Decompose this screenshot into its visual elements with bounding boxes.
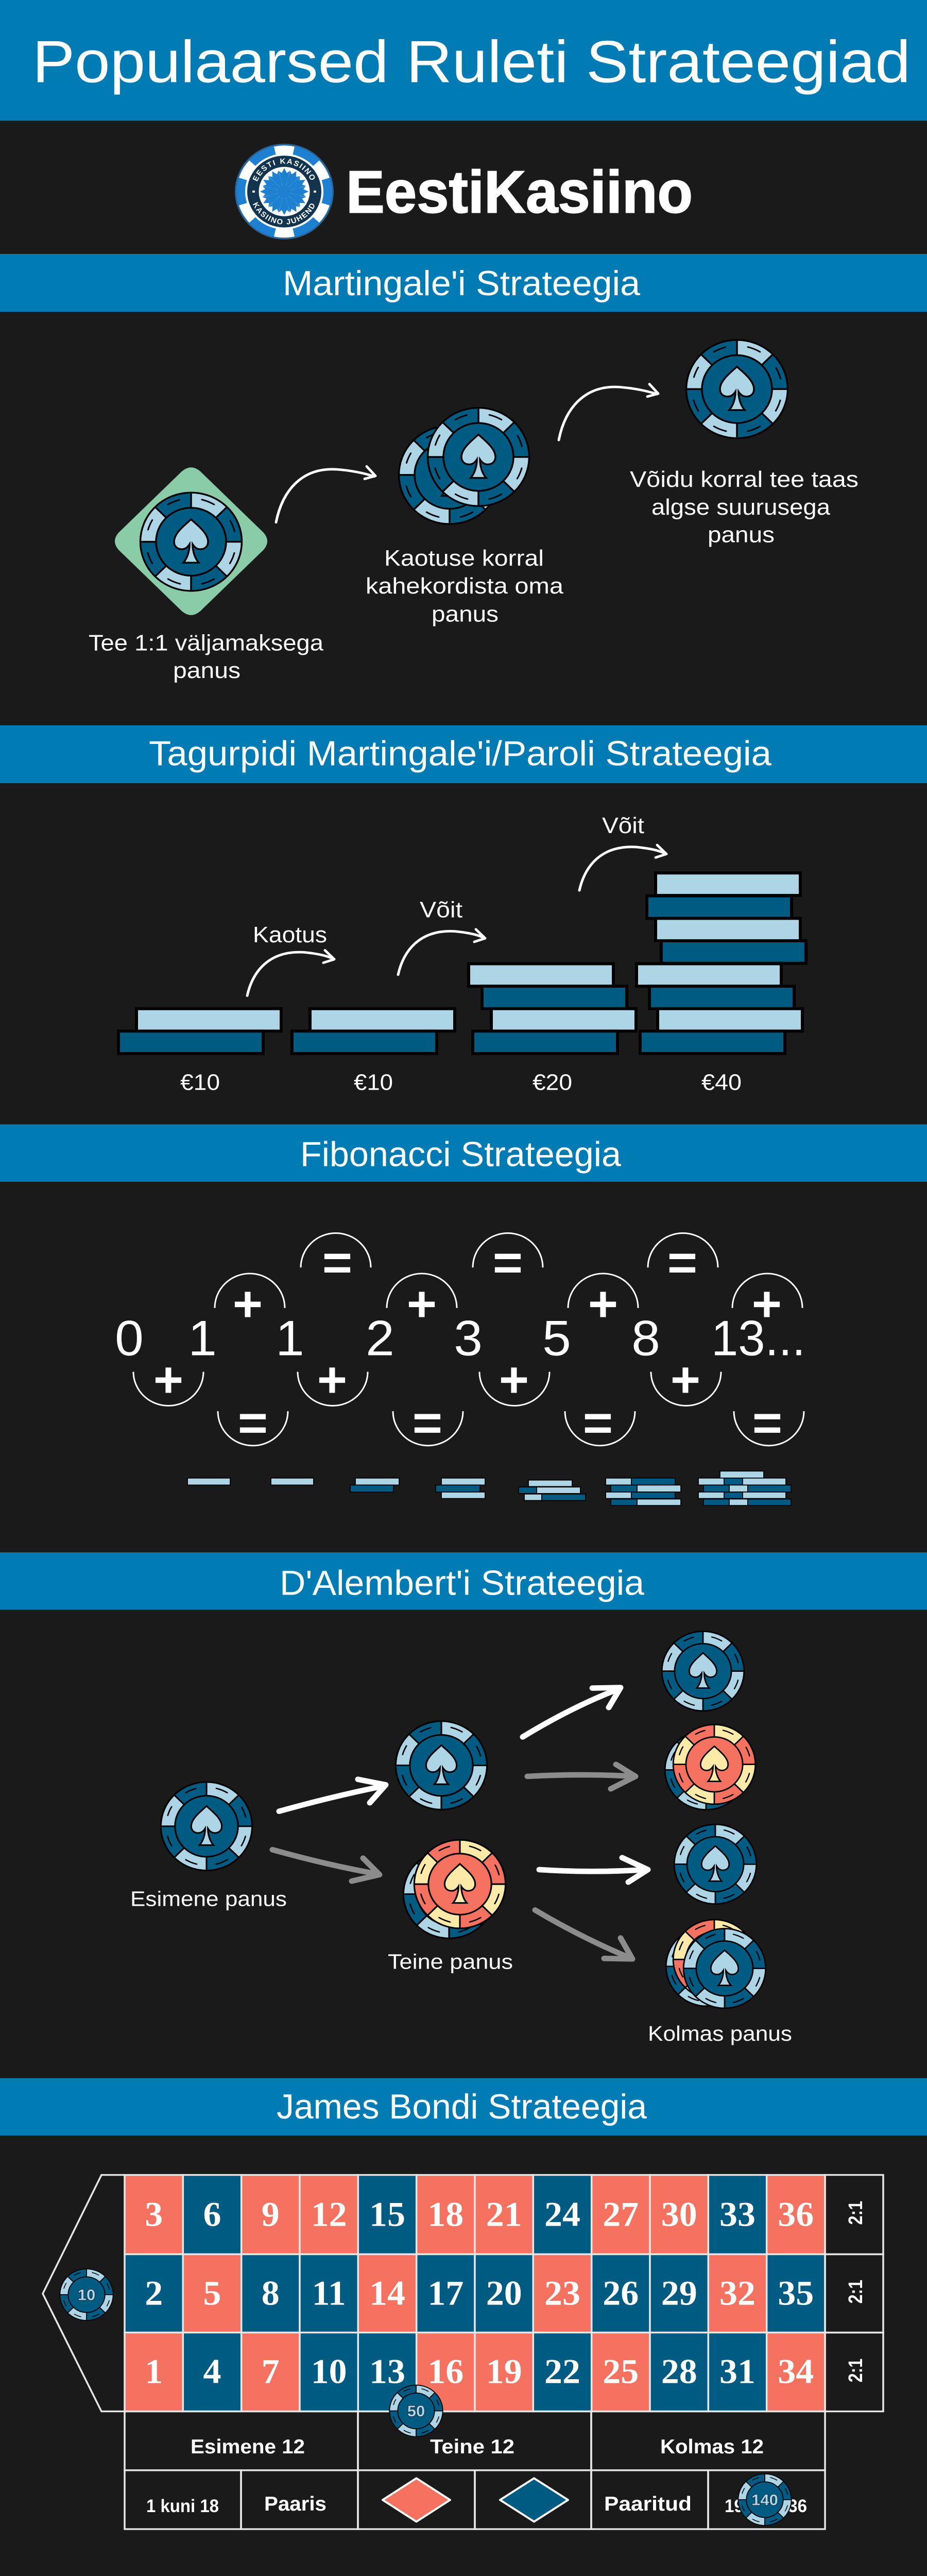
bottom plus arcs: + <box>671 1352 700 1408</box>
number row 3-36 <box>125 2175 825 2254</box>
top plus arcs: + <box>588 1276 618 1332</box>
icon: single chip <box>686 340 788 438</box>
text: Teine panus: Teine panus <box>388 1950 513 1974</box>
heading: Martingale'i Strateegia: Martingale'i Strateegia <box>283 264 641 303</box>
even money bets: 19 kuni 36 <box>725 2496 807 2516</box>
heading: James Bondi Strateegia <box>0 2078 927 2136</box>
column bets 2:1: 2:1 <box>844 2201 866 2225</box>
number row 1-34: 13 <box>369 2352 405 2391</box>
icon: logo chip: KASIINO JUHEND <box>253 202 315 225</box>
text: step 2: Kaotuse korral <box>384 546 544 571</box>
number row 2-35: 2 <box>145 2274 163 2312</box>
number sequence: 2 <box>366 1310 394 1366</box>
arrow: white up <box>523 1688 621 1737</box>
heading: Tagurpidi Martingale'i/Paroli Strateegia <box>0 725 927 783</box>
number sequence: 0 <box>115 1310 144 1366</box>
chip: 50: 50 <box>407 2403 425 2420</box>
panel: D'Alembert tree <box>130 1631 792 2045</box>
text: step 3: panus <box>708 522 775 547</box>
bottom equals arcs: = <box>583 1395 613 1450</box>
step 1: green diamond with chip <box>115 467 267 615</box>
logo wordmark: EestiKasiino <box>346 159 693 226</box>
heading: Fibonacci Strateegia <box>0 1124 927 1182</box>
number sequence: 5 <box>542 1310 571 1366</box>
number row 1-34: 19 <box>486 2352 522 2391</box>
column bets 2:1 <box>825 2175 883 2411</box>
top equals arcs <box>301 1233 718 1290</box>
bottom plus arcs: + <box>499 1352 529 1408</box>
arrow: step 1 to step 2 <box>276 466 375 522</box>
bottom plus arcs: + <box>317 1352 347 1408</box>
icon: third bet chip one <box>662 1631 744 1711</box>
number sequence: 3 <box>454 1310 483 1366</box>
text: Võit second: Võit <box>602 814 644 838</box>
text: Võit first: Võit <box>420 897 462 922</box>
chip: 10 <box>60 2269 113 2320</box>
number row 3-36: 6 <box>203 2195 221 2233</box>
text: Kolmas panus: Kolmas panus <box>648 2022 792 2045</box>
panel: Paroli stacks <box>118 814 806 1095</box>
bottom equals arcs: = <box>413 1395 442 1450</box>
dozen bets <box>125 2411 825 2470</box>
number row 3-36: 9 <box>262 2195 280 2233</box>
arrow: loss <box>247 951 334 996</box>
icon: third bet chip three <box>674 1824 757 1904</box>
column bets 2:1: 2:1 <box>844 2359 866 2382</box>
dozen bets: Teine 12 <box>430 2435 514 2458</box>
even money bets: 1 kuni 18 <box>146 2496 219 2516</box>
amount labels: €40 <box>701 1070 742 1095</box>
text: step 3: Võidu korral tee taas <box>630 467 859 492</box>
arrow: grey down <box>535 1910 632 1959</box>
icon: second bet red chip over blue chip <box>403 1840 506 1938</box>
chip stack: 2 <box>350 1478 399 1492</box>
number sequence: 1 <box>276 1310 304 1366</box>
number row 1-34: 22 <box>544 2352 580 2391</box>
even money bets: Paaritud <box>604 2493 692 2515</box>
text: step 2: kahekordista oma <box>366 574 563 599</box>
number row 3-36: 27 <box>603 2195 639 2233</box>
icon: red diamond <box>383 2478 450 2521</box>
text: step 1: panus <box>173 658 241 683</box>
chip: 140: 140 <box>751 2492 778 2509</box>
number row 1-34: 28 <box>661 2352 697 2391</box>
bottom equals arcs <box>218 1395 804 1450</box>
arrow: white right <box>539 1858 648 1882</box>
logo: EestiKasiino <box>235 143 693 240</box>
chip: 140 <box>738 2474 792 2526</box>
icon: third bet chip two <box>665 1724 756 1810</box>
top plus arcs <box>215 1274 802 1332</box>
top equals arcs: = <box>667 1234 697 1290</box>
chip stack: 1 first <box>187 1478 230 1485</box>
arrow: step 2 to step 3 <box>559 384 658 440</box>
panel: Martingale steps <box>89 340 859 683</box>
chip stack: 5 <box>519 1480 586 1500</box>
number row 1-34: 31 <box>719 2352 756 2391</box>
chip stack: 1 second <box>271 1478 314 1485</box>
title: Populaarsed Ruleti Strateegiad <box>32 28 911 95</box>
number row 3-36: 15 <box>369 2195 405 2233</box>
text: Esimene panus: Esimene panus <box>130 1887 287 1911</box>
bottom plus arcs <box>133 1352 721 1408</box>
top plus arcs: + <box>233 1276 263 1332</box>
dozen bets: Kolmas 12 <box>660 2435 764 2458</box>
icon: first bet chip <box>161 1782 252 1871</box>
top plus arcs: + <box>407 1276 437 1332</box>
text: step 1 <box>89 631 323 683</box>
stack: 40 <box>637 873 806 1054</box>
number sequence <box>115 1310 805 1366</box>
chip stack: 3 <box>436 1478 485 1499</box>
chip stack: 13 <box>698 1471 791 1505</box>
number row 1-34: 34 <box>778 2352 814 2391</box>
chip: 50 <box>389 2385 443 2437</box>
icon: double chip stack <box>399 408 529 524</box>
heading: D'Alembert'i Strateegia: D'Alembert'i Strateegia <box>280 1563 645 1602</box>
number row 2-35: 29 <box>661 2274 697 2312</box>
icon: logo chip: EESTI KASIINO <box>252 159 315 181</box>
icon: second bet blue chip <box>396 1721 487 1809</box>
number sequence: 13... <box>711 1310 805 1366</box>
number row 1-34: 16 <box>427 2352 464 2391</box>
number row 3-36: 36 <box>778 2195 814 2233</box>
text: step 3 <box>630 467 859 547</box>
number row 2-35 <box>125 2254 825 2332</box>
text: step 3: algse suurusega <box>651 495 830 520</box>
zero pocket outline <box>43 2175 125 2411</box>
dozen bets: Esimene 12 <box>191 2435 305 2458</box>
amount labels: €10 <box>354 1070 393 1095</box>
number row 1-34: 10 <box>311 2352 347 2391</box>
number row 1-34: 25 <box>603 2352 639 2391</box>
text: Kaotus: Kaotus <box>253 923 327 947</box>
number row 2-35: 14 <box>369 2274 405 2312</box>
number row 2-35: 11 <box>312 2274 346 2312</box>
number row 3-36: 18 <box>427 2195 464 2233</box>
panel: Fibonacci sequence <box>115 1233 805 1505</box>
number row 2-35: 23 <box>544 2274 580 2312</box>
icon: logo chip <box>235 143 334 240</box>
bottom equals arcs: = <box>238 1395 268 1450</box>
arrow: first to blue chip <box>279 1780 386 1811</box>
stack: 20 <box>469 964 636 1054</box>
number row 2-35: 17 <box>427 2274 464 2312</box>
top plus arcs: + <box>752 1276 782 1332</box>
stack: 10 first <box>118 1009 281 1054</box>
chip: 10: 10 <box>78 2286 95 2303</box>
bottom plus arcs: + <box>153 1352 183 1408</box>
number row 2-35: 20 <box>486 2274 522 2312</box>
heading: Tagurpidi Martingale'i/Paroli Strateegia: Tagurpidi Martingale'i/Paroli Strateegia <box>149 734 772 773</box>
chip stack: 8 <box>606 1478 681 1505</box>
amount labels: €20 <box>533 1070 572 1095</box>
arrow: first to red chip <box>272 1850 380 1881</box>
icon: blue diamond <box>500 2478 568 2521</box>
panel: roulette table <box>43 2175 883 2529</box>
even money bets <box>125 2470 825 2529</box>
icon: third bet chip four <box>666 1920 766 2008</box>
number row 1-34: 1 <box>145 2352 163 2391</box>
arrow: grey right <box>527 1765 636 1789</box>
amount labels <box>180 1070 742 1095</box>
number row 2-35: 5 <box>203 2274 221 2312</box>
text: step 1: Tee 1:1 väljamaksega <box>89 631 323 655</box>
icon: green diamond <box>115 467 267 615</box>
number row 1-34 <box>125 2332 825 2411</box>
text: step 2: panus <box>432 602 499 626</box>
heading: Martingale'i Strateegia <box>0 254 927 312</box>
heading: Fibonacci Strateegia: Fibonacci Strateegia <box>300 1135 622 1174</box>
number row 2-35: 26 <box>603 2274 639 2312</box>
column bets 2:1: 2:1 <box>844 2280 866 2303</box>
top equals arcs: = <box>322 1234 352 1290</box>
icon: chip <box>140 493 242 591</box>
number row 2-35: 35 <box>778 2274 814 2312</box>
even money bets: Paaris <box>264 2493 327 2515</box>
number row 1-34: 7 <box>262 2352 280 2391</box>
number row 3-36: 3 <box>145 2195 163 2233</box>
top equals arcs: = <box>493 1234 523 1290</box>
heading: James Bondi Strateegia: James Bondi Strateegia <box>277 2087 647 2126</box>
text: step 2 <box>366 546 563 626</box>
heading: D'Alembert'i Strateegia <box>0 1552 927 1610</box>
number row 3-36: 21 <box>486 2195 522 2233</box>
arrow: win first <box>398 929 485 975</box>
bottom equals arcs: = <box>752 1395 782 1450</box>
number row 3-36: 30 <box>661 2195 697 2233</box>
number row 3-36: 12 <box>311 2195 347 2233</box>
stack: 10 second <box>292 1009 455 1054</box>
title <box>0 0 927 121</box>
number sequence: 8 <box>631 1310 660 1366</box>
number row 3-36: 24 <box>544 2195 580 2233</box>
arrow: win second <box>579 845 666 890</box>
amount labels: €10 <box>180 1070 220 1095</box>
number sequence: 1 <box>188 1310 217 1366</box>
number row 2-35: 8 <box>262 2274 280 2312</box>
number row 3-36: 33 <box>719 2195 756 2233</box>
number row 1-34: 4 <box>203 2352 221 2391</box>
number row 2-35: 32 <box>719 2274 756 2312</box>
